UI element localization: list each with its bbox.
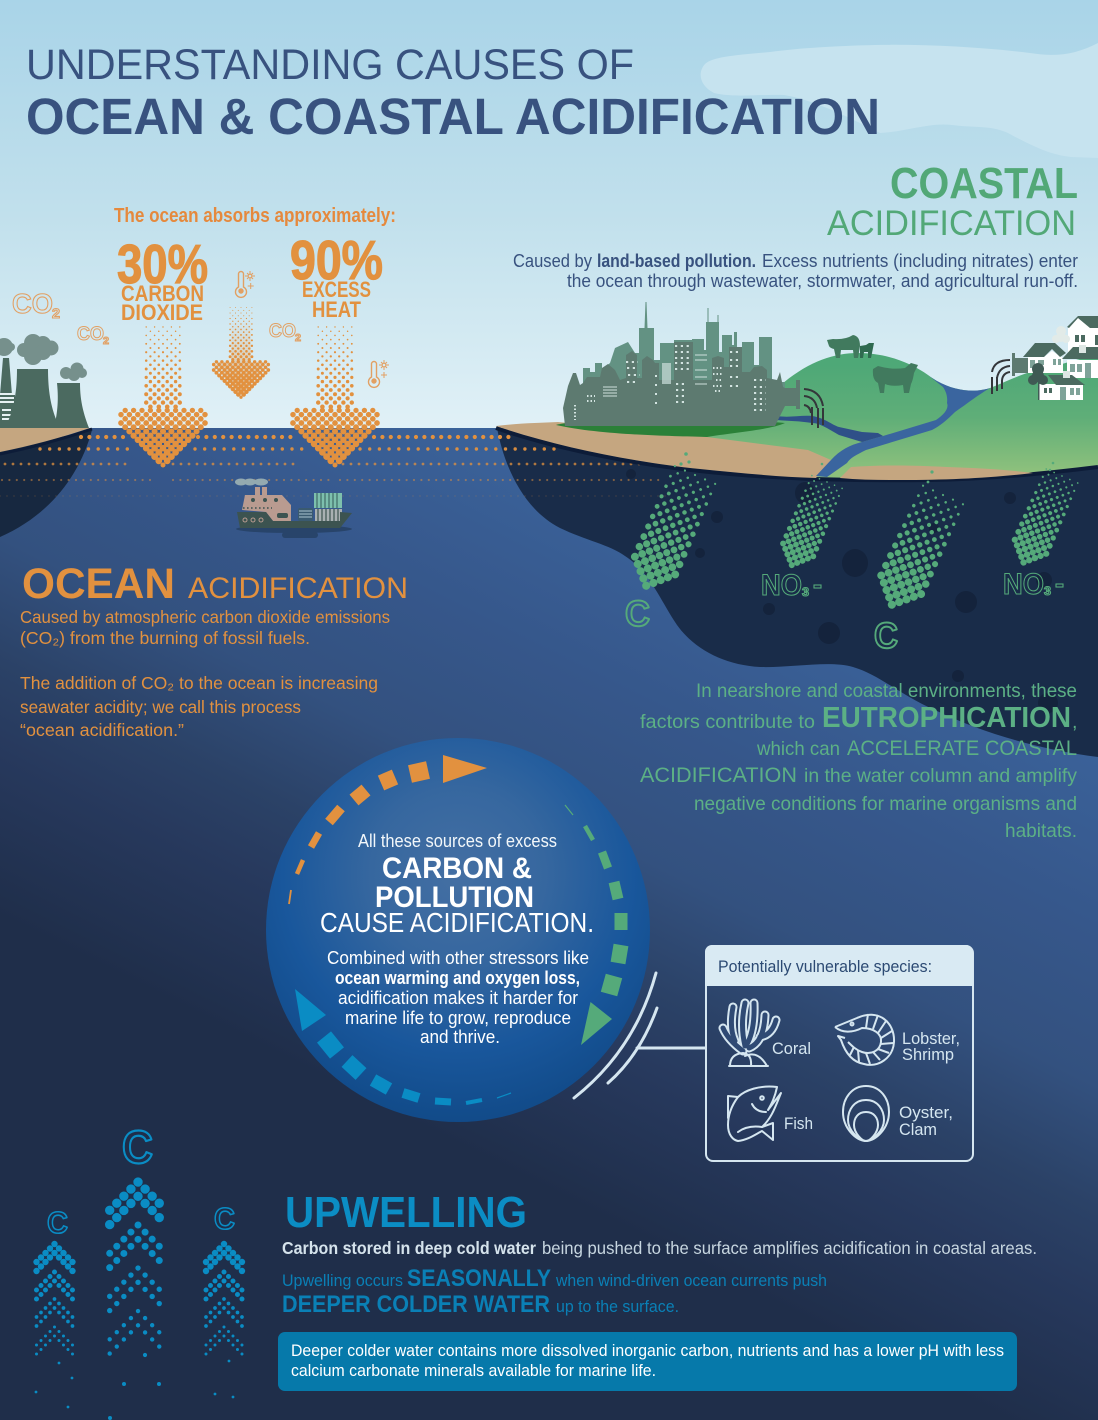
- stat: 30% carbon dioxide: CARBON: [121, 281, 204, 306]
- upwelling seasonal text: DEEPER COLDER WATER: [282, 1291, 550, 1318]
- river: [816, 375, 990, 477]
- upwelling seasonal text: SEASONALLY: [407, 1265, 551, 1292]
- stat: 90% excess heat: [290, 229, 383, 322]
- label: lobster, shrimp: [902, 1029, 960, 1064]
- upwelling chevrons: right: [206, 1244, 242, 1354]
- title: [26, 41, 880, 145]
- eutrophication text: EUTROPHICATION: [822, 702, 1071, 734]
- coastal description: the ocean through wastewater, stormwater, and agricultural run-off.: [567, 271, 1078, 291]
- dotted ocean absorption lines: [0, 437, 668, 496]
- upwelling description: being pushed to the surface amplifies acidification in coastal areas.: [542, 1238, 1037, 1258]
- halftone arrow: middle: [214, 308, 268, 397]
- icon: nitrate NO3: 3: [1044, 584, 1051, 598]
- seabed particles: [626, 469, 1058, 713]
- upwelling seasonal text: [282, 1265, 827, 1318]
- coastal description: Caused by: [513, 251, 592, 271]
- label: oyster, clam: Clam: [899, 1120, 937, 1139]
- title: UNDERSTANDING CAUSES OF: [26, 41, 634, 89]
- icon: carbon C big: C: [122, 1121, 153, 1173]
- suburban runoff discharge: [992, 360, 1010, 394]
- plume 2: [777, 476, 842, 571]
- icon: nitrate NO3: 3: [802, 585, 809, 599]
- icon: carbon C right: C: [214, 1201, 235, 1236]
- shoreline: [496, 428, 1098, 480]
- icon: nitrate NO3: NO: [761, 569, 802, 602]
- upwelling chevrons: left: [36, 1244, 72, 1354]
- eutrophication text: in the water column and amplify: [804, 765, 1077, 787]
- icon: coral: [723, 1003, 776, 1066]
- house top right: [1068, 318, 1098, 352]
- circle text: marine life to grow, reproduce: [345, 1008, 571, 1028]
- upwelling description: Carbon stored in deep cold water: [282, 1238, 536, 1258]
- eutrophication text: ACIDIFICATION: [640, 764, 797, 787]
- icon: thermometer: [236, 271, 255, 297]
- icon: carbon C: C: [874, 615, 898, 656]
- ocean acidification heading: OCEAN: [22, 560, 175, 608]
- city windows: [575, 346, 766, 420]
- circle text: [320, 831, 594, 1047]
- cooling tower: [54, 383, 89, 428]
- circle text: All these sources of excess: [358, 831, 557, 851]
- circle text: acidification makes it harder for: [338, 988, 578, 1008]
- central circle: [266, 738, 650, 1122]
- dark tree: [1028, 363, 1048, 400]
- circle text: Combined with other stressors like: [327, 948, 589, 968]
- label: lobster, shrimp: Lobster,: [902, 1029, 960, 1048]
- river tributary: [777, 416, 883, 442]
- eutrophication text: habitats.: [1005, 820, 1077, 842]
- eutrophication text: [640, 680, 1077, 842]
- plume 4: [1008, 469, 1078, 569]
- eutrophication text: ,: [1072, 711, 1077, 733]
- halftone arrow: carbon dioxide: [121, 327, 205, 465]
- deep coastal seabed shape: [497, 428, 1098, 757]
- stat: 30% carbon dioxide: 30%: [117, 233, 208, 295]
- green land: [556, 353, 1098, 480]
- stat: 90% excess heat: HEAT: [312, 297, 361, 322]
- plume 1: [626, 466, 715, 595]
- wastewater pipe discharge: [804, 389, 823, 428]
- blue dashed arc with arrow: [295, 989, 511, 1103]
- circle text: CAUSE ACIDIFICATION.: [320, 907, 594, 938]
- icon: thermometer: [368, 360, 389, 387]
- icon: shrimp: [835, 1014, 894, 1065]
- label: lobster, shrimp: Shrimp: [902, 1045, 954, 1064]
- orange dashed arc with arrow: [289, 755, 487, 904]
- ocean acidification description: The addition of CO₂ to the ocean is increasing: [20, 673, 378, 693]
- icon: carbon C: C: [625, 593, 650, 634]
- nitrate and carbon plumes: [626, 452, 1078, 614]
- upwelling heading: UPWELLING: [285, 1188, 527, 1237]
- plume 3: [872, 486, 963, 614]
- upwelling seasonal text: Upwelling occurs: [282, 1271, 403, 1290]
- ocean acidification heading: ACIDIFICATION: [188, 572, 408, 605]
- ocean acidification description: Caused by atmospheric carbon dioxide emissions: [20, 607, 390, 627]
- circle text: CARBON &: [382, 852, 532, 885]
- coastal description: land-based pollution.: [597, 251, 756, 271]
- ocean water: [0, 428, 1098, 1420]
- suburb houses: [1012, 316, 1098, 400]
- upwelling chevrons: center: [110, 1182, 166, 1354]
- callout: deeper colder water: Deeper colder water contains more dissolved inorganic carbon, nutrients and has a lower pH with less: [291, 1341, 1004, 1360]
- left deep seabed shape: [0, 430, 92, 537]
- panel header: [705, 945, 973, 986]
- icon: CO2 small: CO: [77, 324, 104, 345]
- coastal land: [496, 353, 1098, 480]
- label: oyster, clam: Oyster,: [899, 1103, 953, 1122]
- callout: deeper colder water: calcium carbonate minerals available for marine life.: [291, 1361, 656, 1380]
- coastal acidification heading: [827, 159, 1078, 243]
- callout: deeper colder water: [278, 1332, 1017, 1391]
- icon: CO2 large: 2: [52, 305, 60, 321]
- circle text: ocean warming and oxygen loss,: [335, 968, 580, 988]
- stat: 30% carbon dioxide: [117, 233, 208, 325]
- coastal description: Excess nutrients (including nitrates) enter: [762, 251, 1078, 271]
- eutrophication text: In nearshore and coastal environments, these: [696, 680, 1077, 702]
- circle text: and thrive.: [420, 1027, 500, 1047]
- ocean acidification description: seawater acidity; we call this process: [20, 697, 301, 717]
- city skyline: [563, 302, 800, 426]
- cargo ship: [235, 478, 352, 538]
- icon: CO2 small: 2: [103, 336, 109, 347]
- back skyline: [583, 302, 785, 400]
- icon: CO2 small: CO: [269, 321, 296, 342]
- land under city: [556, 419, 785, 437]
- right pipe: [1012, 353, 1030, 376]
- house front: [1039, 384, 1083, 400]
- stat: 90% excess heat: 90%: [290, 229, 383, 291]
- ocean acidification description: (CO₂) from the burning of fossil fuels.: [20, 628, 310, 648]
- coastal acidification heading: COASTAL: [890, 159, 1078, 208]
- light tree: [1052, 326, 1070, 343]
- house middle: [1028, 351, 1063, 373]
- connector from circle to species panel: [574, 973, 705, 1098]
- eutrophication text: factors contribute to: [640, 711, 815, 733]
- upwelling description: [282, 1238, 1037, 1258]
- stray dots: [679, 452, 1054, 483]
- icon: CO2 large: CO: [12, 288, 53, 319]
- label: oyster, clam: [899, 1103, 953, 1139]
- icon: carbon C left: C: [47, 1205, 68, 1240]
- upwelling seasonal text: up to the surface.: [556, 1297, 679, 1316]
- stat: 90% excess heat: EXCESS: [302, 277, 371, 302]
- icon: fish: [728, 1087, 781, 1141]
- halftone arrow: excess heat: [293, 327, 377, 465]
- icon: CO2 small: 2: [295, 333, 301, 344]
- eutrophication text: negative conditions for marine organisms and: [694, 793, 1077, 815]
- panel heading: Potentially vulnerable species:: [718, 957, 932, 976]
- front skyline: [563, 342, 800, 426]
- upwelling seasonal text: when wind-driven ocean currents push: [555, 1271, 827, 1290]
- ocean absorbs heading: The ocean absorbs approximately:: [114, 205, 396, 227]
- sky background: [0, 0, 1098, 430]
- eutrophication text: which can: [756, 738, 840, 760]
- ocean acidification heading: [22, 560, 408, 608]
- icon: oyster: [843, 1086, 889, 1141]
- panel: vulnerable species: [705, 945, 973, 1161]
- stat: 30% carbon dioxide: DIOXIDE: [121, 300, 203, 325]
- cooling tower: [5, 369, 60, 428]
- label: fish: Fish: [784, 1114, 813, 1133]
- ocean acidification description: “ocean acidification.”: [20, 720, 184, 740]
- label: coral: Coral: [772, 1039, 811, 1058]
- cows: [827, 335, 918, 393]
- chimney and factory: [0, 358, 15, 428]
- title: OCEAN & COASTAL ACIDIFICATION: [26, 88, 880, 145]
- smoke: [0, 334, 87, 381]
- left shore sand: [0, 428, 90, 452]
- circle text: POLLUTION: [375, 881, 534, 914]
- power plant and left shore: [0, 334, 92, 454]
- green dashed arc with arrow: [565, 805, 621, 1045]
- sand: [496, 422, 831, 478]
- eutrophication text: ACCELERATE COASTAL: [847, 737, 1077, 760]
- cloud: [701, 43, 1098, 158]
- house right: [1067, 360, 1098, 378]
- coastal acidification heading: ACIDIFICATION: [827, 204, 1076, 243]
- ocean acidification description: [20, 607, 390, 740]
- icon: nitrate NO3: NO: [1003, 568, 1044, 601]
- coastal description: [513, 251, 1078, 291]
- upwelling stray dots: [35, 1353, 234, 1420]
